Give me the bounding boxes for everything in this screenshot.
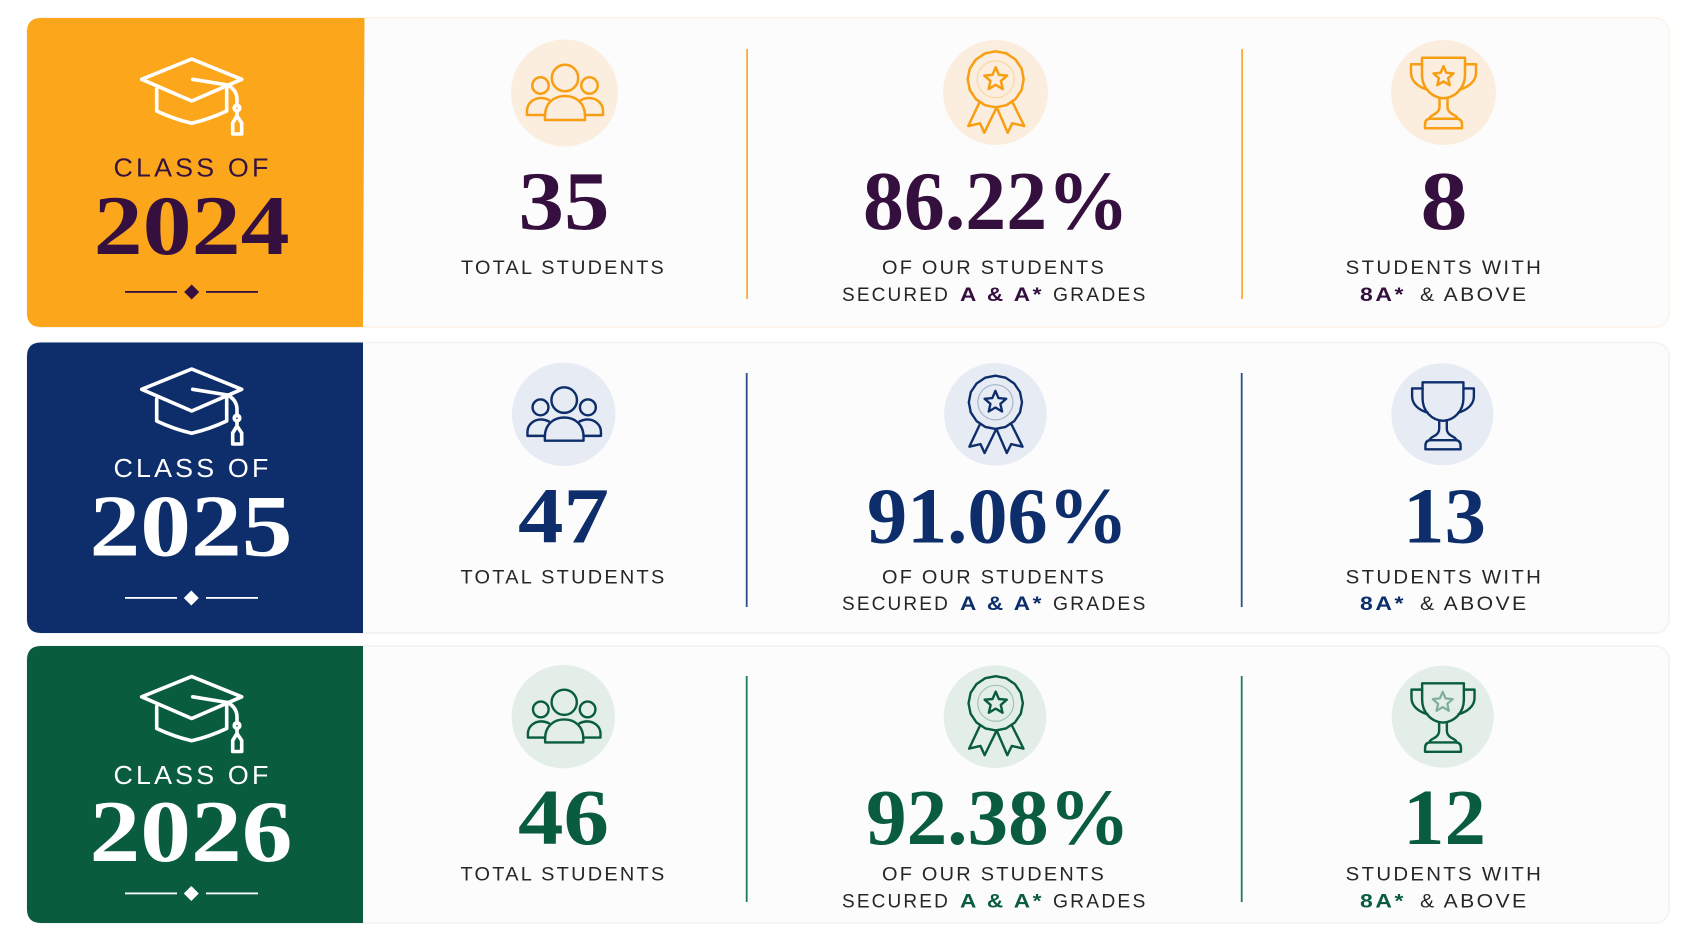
caption: TOTAL STUDENTS [461, 257, 666, 279]
caption emphasis line: 8A* [1360, 284, 1406, 306]
ornament [125, 590, 258, 606]
caption: OF OUR STUDENTS [882, 566, 1106, 588]
year block 2024 [27, 18, 364, 327]
icon: people [511, 40, 618, 146]
panel: class of 2026 row [27, 646, 1669, 923]
icon: medal [944, 363, 1047, 466]
caption: TOTAL STUDENTS [460, 566, 666, 588]
icon: trophy [1391, 40, 1496, 145]
icon: trophy [1392, 666, 1494, 768]
caption emphasis line: & ABOVE [1420, 891, 1528, 913]
stat: students with 8A* [1346, 363, 1543, 615]
number: 8 [1420, 155, 1468, 248]
year: 2025 [90, 478, 292, 576]
caption: STUDENTS WITH [1346, 566, 1543, 588]
year: 2026 [90, 784, 292, 881]
class of label: CLASS OF [114, 455, 272, 483]
caption: TOTAL STUDENTS [460, 864, 666, 886]
caption emphasis line: GRADES [1053, 593, 1148, 615]
stat: percentage A and A* [842, 363, 1148, 615]
caption emphasis line: & ABOVE [1420, 284, 1528, 306]
number: 92.38% [866, 775, 1130, 862]
number: 86.22% [863, 155, 1129, 248]
number: 35 [518, 155, 610, 248]
class of label: CLASS OF [114, 155, 272, 183]
row card background [27, 342, 1669, 633]
caption emphasis line: A & A* [960, 284, 1044, 306]
number: 47 [518, 474, 609, 560]
stat: students with 8A* [1346, 40, 1543, 306]
icon: graduation cap [142, 59, 242, 134]
caption: OF OUR STUDENTS [882, 257, 1106, 279]
number: 91.06% [867, 474, 1128, 560]
year block 2025 [27, 342, 363, 633]
icon: graduation cap [142, 676, 242, 752]
number: 13 [1403, 474, 1486, 560]
caption emphasis line: 8A* [1360, 891, 1406, 913]
caption emphasis line: & ABOVE [1420, 593, 1528, 615]
number: 46 [518, 775, 609, 862]
icon: medal [943, 40, 1048, 145]
caption emphasis line: A & A* [960, 593, 1044, 615]
caption: STUDENTS WITH [1346, 257, 1543, 279]
icon: medal [944, 665, 1046, 768]
caption emphasis line: SECURED [842, 891, 950, 913]
stat: total students [460, 665, 666, 886]
stat: percentage A and A* [842, 40, 1148, 306]
panel: class of 2024 row [27, 18, 1669, 327]
icon: people [512, 363, 615, 466]
caption emphasis line: GRADES [1053, 891, 1148, 913]
caption emphasis line: GRADES [1053, 284, 1148, 306]
panel: class of 2025 row [27, 342, 1669, 633]
caption: OF OUR STUDENTS [882, 864, 1106, 886]
stat: total students [461, 40, 666, 279]
row card background [27, 18, 1669, 327]
caption emphasis line: A & A* [960, 891, 1044, 913]
class of label: CLASS OF [114, 762, 272, 790]
stat: students with 8A* [1346, 666, 1543, 913]
number: 12 [1403, 775, 1486, 862]
row card background [27, 646, 1669, 923]
icon: trophy [1391, 363, 1493, 465]
caption: STUDENTS WITH [1346, 864, 1543, 886]
caption emphasis line: SECURED [842, 284, 950, 306]
year: 2024 [94, 179, 290, 273]
stat: total students [460, 363, 666, 588]
icon: people [512, 665, 615, 768]
icon: graduation cap [142, 369, 242, 444]
caption emphasis line: 8A* [1360, 593, 1406, 615]
stat: percentage A and A* [842, 665, 1148, 913]
ornament [125, 284, 258, 300]
year block 2026 [27, 646, 363, 923]
ornament [125, 886, 258, 901]
caption emphasis line: SECURED [842, 593, 950, 615]
